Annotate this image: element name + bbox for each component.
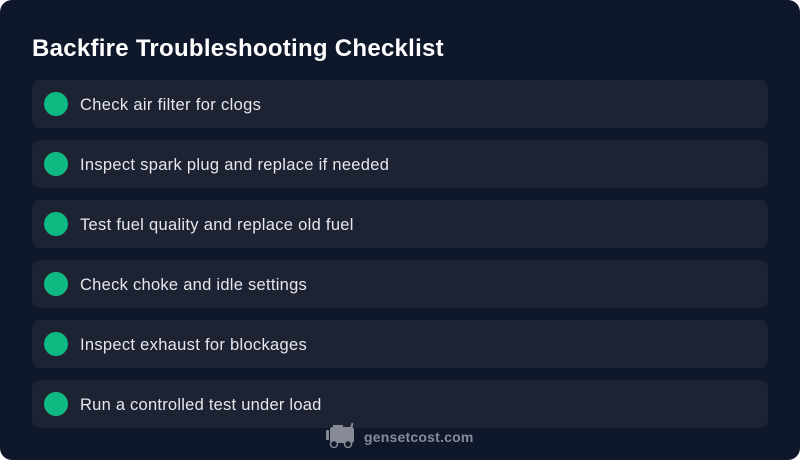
icon: generator [326, 422, 354, 448]
brand watermark [326, 422, 474, 448]
checklist item 1 [32, 80, 768, 128]
checklist item 2: Inspect spark plug and replace if needed [80, 156, 389, 174]
checklist item 3: Test fuel quality and replace old fuel [80, 216, 354, 234]
checklist item 4: Check choke and idle settings [80, 276, 307, 294]
checklist item 2 [32, 140, 768, 188]
brand name: gensetcost.com [364, 429, 474, 445]
checklist item 4 [32, 260, 768, 308]
checklist item 5 [32, 320, 768, 368]
checklist item 5: Inspect exhaust for blockages [80, 336, 307, 354]
checklist item 3 [32, 200, 768, 248]
title: Backfire Troubleshooting Checklist [32, 35, 444, 62]
checklist item 1: Check air filter for clogs [80, 96, 261, 114]
checklist item 6: Run a controlled test under load [80, 396, 322, 414]
checklist item 6 [32, 380, 768, 428]
